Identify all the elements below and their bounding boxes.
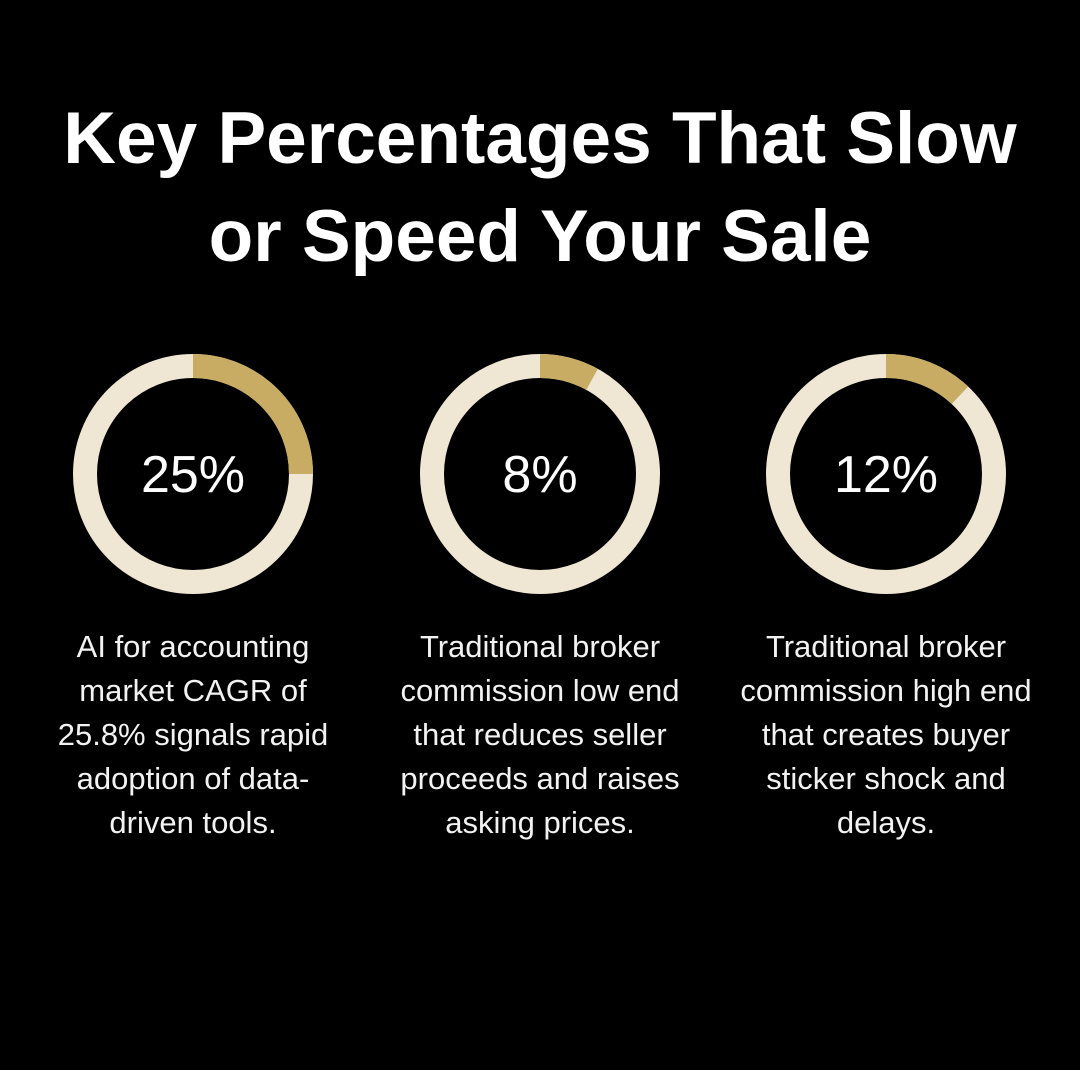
ring: 8% — [420, 354, 660, 594]
ring: 8%: 8% — [502, 446, 578, 504]
description 2: asking prices. — [445, 805, 635, 840]
description 1: market CAGR of — [79, 673, 307, 708]
description 3: delays. — [837, 805, 935, 840]
description 3: sticker shock and — [766, 761, 1006, 796]
title: Key Percentages That Slow — [63, 98, 1017, 179]
description 3: commission high end — [740, 673, 1032, 708]
description 1: 25.8% signals rapid — [58, 717, 328, 752]
title: or Speed Your Sale — [209, 196, 871, 277]
description 2: proceeds and raises — [400, 761, 680, 796]
description 2 — [400, 629, 680, 840]
description 1: AI for accounting — [77, 629, 309, 664]
ring: 12%: 12% — [834, 446, 938, 504]
description 2: that reduces seller — [413, 717, 667, 752]
ring: 25%: 25% — [141, 446, 245, 504]
title — [63, 98, 1017, 277]
description 2: commission low end — [400, 673, 680, 708]
ring: 25% — [73, 354, 313, 594]
description 2: Traditional broker — [420, 629, 660, 664]
description 1 — [58, 629, 328, 840]
description 3: Traditional broker — [766, 629, 1006, 664]
description 3: that creates buyer — [762, 717, 1010, 752]
description 1: adoption of data- — [77, 761, 309, 796]
description 1: driven tools. — [109, 805, 277, 840]
ring: 12% — [766, 354, 1006, 594]
description 3 — [740, 629, 1032, 840]
